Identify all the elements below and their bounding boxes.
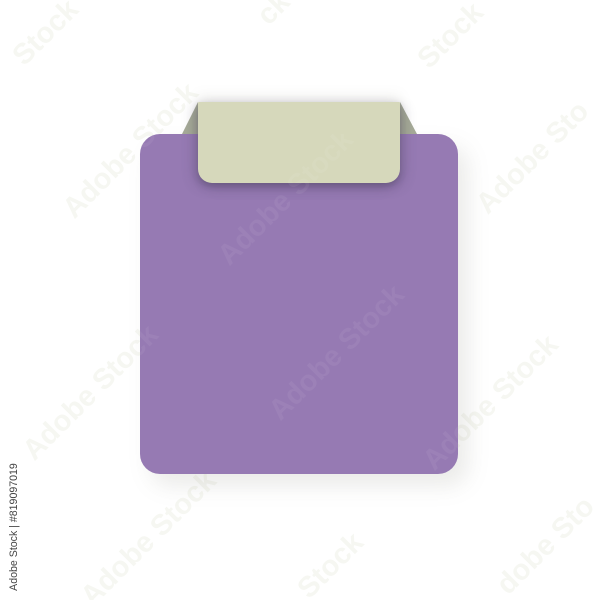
stock image id text: Adobe Stock | #819097019: [8, 463, 20, 591]
watermark: overlay on card and tab: Adobe Stock: [263, 278, 411, 427]
watermark: background layer: dobe Sto: [490, 490, 600, 600]
watermark: background layer: Adobe Stock: [57, 76, 205, 225]
watermark: overlay on card and tab: Adobe Stock: [212, 123, 360, 272]
watermark: background layer: Adobe Sto: [470, 95, 595, 220]
watermark: overlay on card and tab: [288, 183, 309, 188]
watermark: overlay on card and tab: Adobe Stock: [57, 76, 205, 225]
purple note card: [140, 134, 458, 474]
watermark: background layer: Adobe Stock: [417, 328, 565, 477]
watermark: background layer: Adobe Stock: [17, 318, 165, 467]
watermark: overlay on card and tab: Adobe Stock: [17, 318, 165, 467]
sage green label tab: [198, 102, 400, 183]
watermark: overlay on card and tab: Adobe Stock: [417, 328, 565, 477]
